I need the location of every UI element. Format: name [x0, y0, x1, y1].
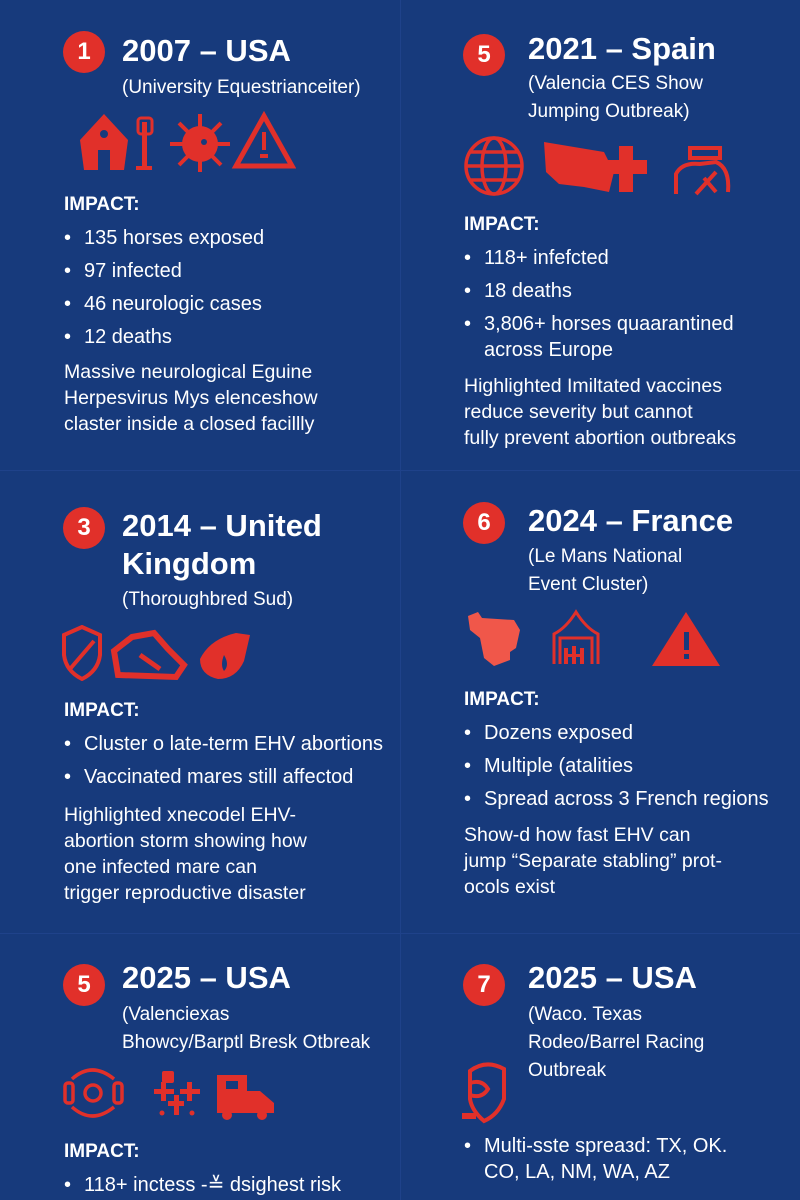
title: Kingdom	[122, 546, 256, 581]
title: 2025 – USA	[528, 960, 697, 995]
subtitle	[528, 546, 682, 595]
icons: shield, hand, drop	[62, 625, 250, 681]
description: trigger reproductive disaster	[64, 882, 306, 904]
title	[122, 508, 322, 581]
impact bullets	[464, 722, 769, 810]
impact bullets: Cluster o late-term EHV abortions	[84, 733, 383, 755]
badge 1: 1	[77, 38, 91, 65]
impact bullets: 18 deaths	[484, 280, 572, 302]
subtitle: (Valencia CES Show	[528, 73, 703, 94]
impact bullets: 135 horses exposed	[84, 227, 264, 249]
subtitle: (Waco. Texas	[528, 1004, 642, 1025]
description: Herpesvirus Mys elenceshow	[64, 387, 318, 409]
badge 6: 6	[477, 509, 491, 536]
impact bullets: Vaccinated mares still affectod	[84, 766, 353, 788]
subtitle: Rodeo/Barrel Racing	[528, 1032, 704, 1053]
badge 5	[463, 34, 505, 76]
impact bullets: Spread across 3 French regions	[484, 788, 769, 810]
panel: 2024 France	[463, 502, 769, 898]
description	[64, 361, 318, 435]
description: jump “Separate stabling” prot-	[464, 850, 722, 872]
description	[464, 375, 736, 449]
impact bullets: across Europe	[484, 339, 613, 361]
impact heading: IMPACT:	[464, 214, 540, 235]
title: 2014 – United	[122, 508, 322, 543]
impact bullets	[464, 247, 734, 361]
impact bullets: Dozens exposed	[484, 722, 633, 744]
badge 3	[63, 507, 105, 549]
panel: 2007 USA	[63, 31, 361, 435]
description: Highlighted xnecodel EHV-	[64, 804, 296, 826]
icons: badge, crosses, truck	[63, 1068, 274, 1120]
panel: 2021 Spain	[463, 31, 736, 449]
badge 7	[463, 964, 505, 1006]
subtitle	[528, 1004, 704, 1081]
description: one infected mare can	[64, 856, 257, 878]
title: 2021 – Spain	[528, 31, 716, 66]
impact bullets: 46 neurologic cases	[84, 293, 262, 315]
badge 5: 5	[477, 41, 491, 68]
panel: 2014 UK	[62, 507, 383, 904]
description	[464, 824, 722, 898]
subtitle: Event Cluster)	[528, 574, 648, 595]
icons: map, venue, warning	[468, 609, 720, 666]
description: Show-d how fast EHV can	[464, 824, 691, 846]
subtitle: (Le Mans National	[528, 546, 682, 567]
impact heading: IMPACT:	[64, 1141, 140, 1162]
subtitle: (Valenciexas	[122, 1004, 229, 1025]
icons: globe, map cross, stable	[464, 136, 730, 196]
description: ocols exist	[464, 876, 555, 898]
panel: 2025 USA left	[63, 960, 370, 1196]
impact bullets: 12 deaths	[84, 326, 172, 348]
impact bullets: 118+ inctess -≚ dsighest risk	[84, 1174, 341, 1196]
impact bullets	[64, 733, 383, 788]
impact bullets	[464, 1135, 727, 1183]
subtitle: (University Equestrianceiter)	[122, 77, 361, 98]
description: claster inside a closed facillly	[64, 413, 314, 435]
icons: barn, post, virus, warning	[80, 111, 296, 172]
badge 5: 5	[77, 971, 91, 998]
subtitle: Jumping Outbreak)	[528, 101, 690, 122]
subtitle: Outbreak	[528, 1060, 606, 1081]
description: Highlighted Imiltated vaccines	[464, 375, 722, 397]
title: 2025 – USA	[122, 960, 291, 995]
description: reduce severity but cannot	[464, 401, 693, 423]
badge 3: 3	[77, 514, 91, 541]
subtitle: (Thoroughbred Sud)	[122, 589, 293, 610]
subtitle	[122, 1004, 370, 1053]
badge 6	[463, 502, 505, 544]
impact bullets	[64, 227, 264, 348]
subtitle	[528, 73, 703, 122]
impact bullets: Multi-sste spreaзd: TX, OK.	[484, 1135, 727, 1157]
subtitle: Bhowcy/Barptl Bresk Otbreak	[122, 1032, 370, 1053]
description: fully prevent abortion outbreaks	[464, 427, 736, 449]
badge 7: 7	[477, 971, 491, 998]
badge 1	[63, 31, 105, 73]
impact bullets: 3,806+ horses quaarantined	[484, 313, 734, 335]
impact bullets: 97 infected	[84, 260, 182, 282]
title: 2024 – France	[528, 503, 733, 538]
panel: 2025 USA right	[462, 960, 727, 1183]
impact bullets: Multiple (atalities	[484, 755, 633, 777]
icon: rider helmet	[462, 1062, 506, 1124]
description: Massive neurological Eguine	[64, 361, 312, 383]
impact bullets: 118+ infefcted	[484, 247, 609, 269]
title: 2007 – USA	[122, 33, 291, 68]
impact heading: IMPACT:	[64, 700, 140, 721]
impact bullets: CO, LA, NM, WA, AZ	[484, 1161, 670, 1183]
impact heading: IMPACT:	[464, 689, 540, 710]
description: abortion storm showing how	[64, 830, 307, 852]
impact heading: IMPACT:	[64, 194, 140, 215]
badge 5	[63, 964, 105, 1006]
description	[64, 804, 307, 904]
